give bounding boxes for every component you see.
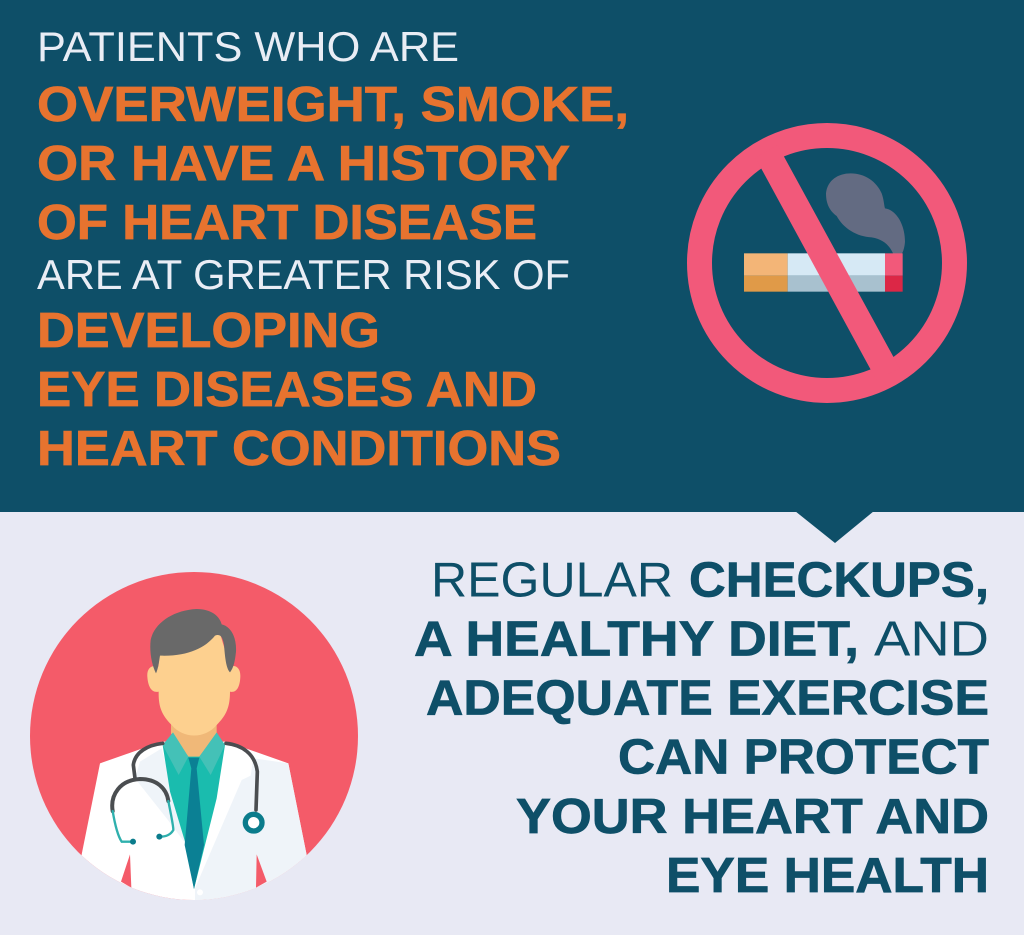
text block: protection advice: EYE HEALTH: [666, 848, 989, 903]
text block: protection advice: ADEQUATE EXERCISE: [426, 670, 989, 726]
panel: lower background: [0, 512, 1024, 935]
text block: risk statement: EYE DISEASES AND: [37, 362, 537, 417]
text block: risk statement: DEVELOPING: [37, 303, 380, 358]
text block: risk statement: ARE AT GREATER RISK OF: [37, 252, 570, 298]
cigarette: [744, 253, 903, 292]
text block: risk statement: PATIENTS WHO ARE: [37, 24, 459, 70]
text block: protection advice: CHECKUPS,: [689, 552, 989, 608]
tie: [185, 758, 204, 889]
text block: protection advice: A HEALTHY DIET,: [414, 612, 859, 666]
text block: protection advice: AND: [874, 612, 989, 666]
panel: risk factors: [0, 0, 1024, 543]
smoke: [826, 173, 905, 254]
text block: protection advice: YOUR HEART AND: [516, 789, 989, 844]
text block: risk statement: OF HEART DISEASE: [37, 195, 537, 250]
text block: protection advice: REGULAR: [431, 552, 673, 608]
text block: protection advice: CAN PROTECT: [618, 730, 989, 784]
speech pointer: [795, 511, 874, 543]
face: [147, 633, 240, 735]
text block: risk statement: OR HAVE A HISTORY: [37, 136, 570, 191]
text block: risk statement: [37, 24, 629, 476]
neck: [171, 722, 217, 757]
stethoscope: [112, 743, 262, 842]
coat button: [197, 889, 203, 895]
red circle background: [30, 572, 358, 900]
icon: doctor: [30, 572, 358, 912]
coat vents: [121, 854, 131, 888]
prohibition sign: [699, 135, 954, 390]
icon: no smoking: [699, 135, 954, 390]
text block: risk statement: HEART CONDITIONS: [37, 421, 561, 476]
text block: protection advice: [414, 552, 989, 903]
hair: [150, 609, 236, 673]
shirt: [163, 733, 225, 889]
collar: [163, 732, 188, 775]
text block: risk statement: OVERWEIGHT, SMOKE,: [37, 77, 629, 132]
white coat: [82, 742, 307, 900]
